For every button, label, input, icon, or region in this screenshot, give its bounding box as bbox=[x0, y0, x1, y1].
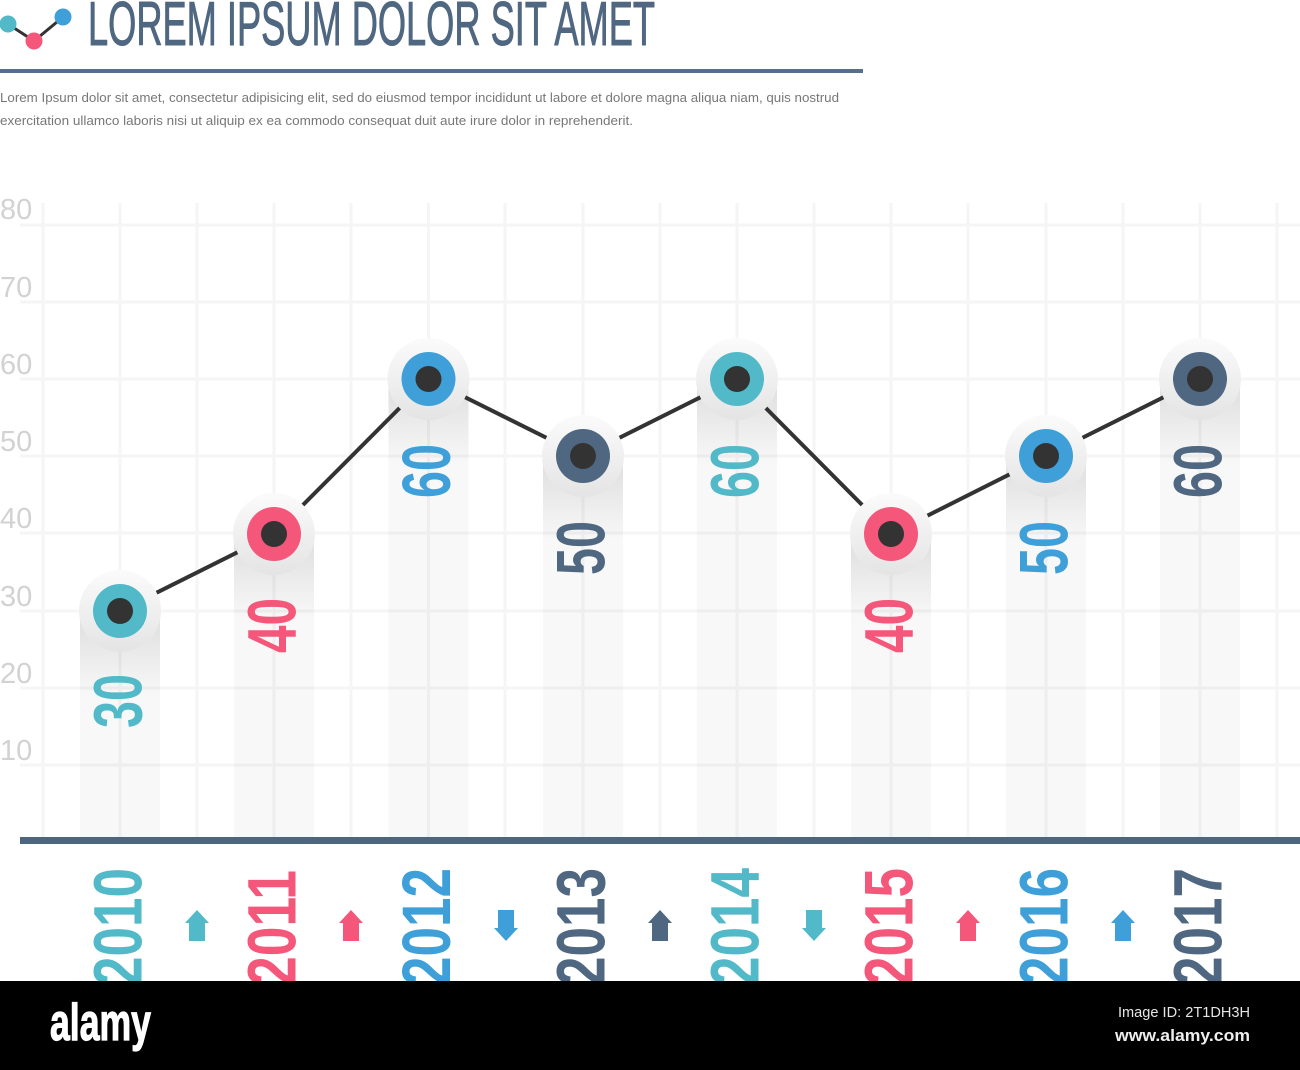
year labels bbox=[80, 868, 1236, 986]
data value labels: 60 bbox=[1160, 444, 1236, 498]
y axis labels bbox=[0, 194, 32, 767]
y axis labels: 20 bbox=[0, 658, 32, 690]
y axis labels: 30 bbox=[0, 581, 32, 613]
y axis labels: 50 bbox=[0, 426, 32, 458]
intro text: Lorem Ipsum dolor sit amet, consectetur adipisicing elit, sed do eiusmod tempor incididunt ut labore et dolore magna aliqua niam, quis nostrud bbox=[0, 90, 839, 105]
footer bar: www.alamy.com bbox=[1114, 1026, 1250, 1045]
footer bar bbox=[0, 981, 1300, 1070]
year labels: 2015 bbox=[850, 868, 928, 986]
y axis labels: 60 bbox=[0, 349, 32, 381]
icon: logo with connected dots bbox=[0, 8, 72, 50]
data value labels: 50 bbox=[542, 521, 620, 575]
data value labels: 60 bbox=[696, 444, 774, 498]
year labels: 2013 bbox=[542, 868, 620, 986]
year labels: 2014 bbox=[696, 868, 774, 986]
year labels: 2011 bbox=[234, 870, 310, 986]
data value labels: 30 bbox=[80, 674, 156, 728]
year labels: 2017 bbox=[1160, 868, 1236, 986]
footer bar: Image ID: 2T1DH3H bbox=[1118, 1004, 1250, 1021]
bars with shadows bbox=[80, 379, 1240, 837]
title rule bbox=[0, 69, 863, 73]
year labels: 2016 bbox=[1006, 868, 1082, 986]
y axis labels: 70 bbox=[0, 272, 32, 304]
x axis bar bbox=[20, 837, 1300, 844]
intro text: exercitation ullamco laboris nisi ut aliquip ex ea commodo consequat duit aute irure dolor in reprehenderit. bbox=[0, 113, 633, 128]
trend arrows bbox=[185, 910, 1135, 941]
y axis labels: 10 bbox=[0, 735, 32, 767]
y axis labels: 80 bbox=[0, 194, 32, 226]
data value labels: 40 bbox=[850, 598, 928, 653]
intro text bbox=[0, 90, 839, 128]
data value labels: 50 bbox=[1006, 521, 1082, 575]
data value labels: 40 bbox=[234, 598, 310, 653]
year labels: 2010 bbox=[80, 868, 156, 986]
y axis labels: 40 bbox=[0, 503, 32, 535]
data value labels: 60 bbox=[388, 444, 465, 498]
data value labels bbox=[80, 444, 1236, 728]
footer bar: alamy bbox=[50, 994, 151, 1052]
year labels: 2012 bbox=[388, 868, 465, 986]
data point markers bbox=[79, 338, 1241, 652]
line chart connector bbox=[120, 379, 1200, 611]
